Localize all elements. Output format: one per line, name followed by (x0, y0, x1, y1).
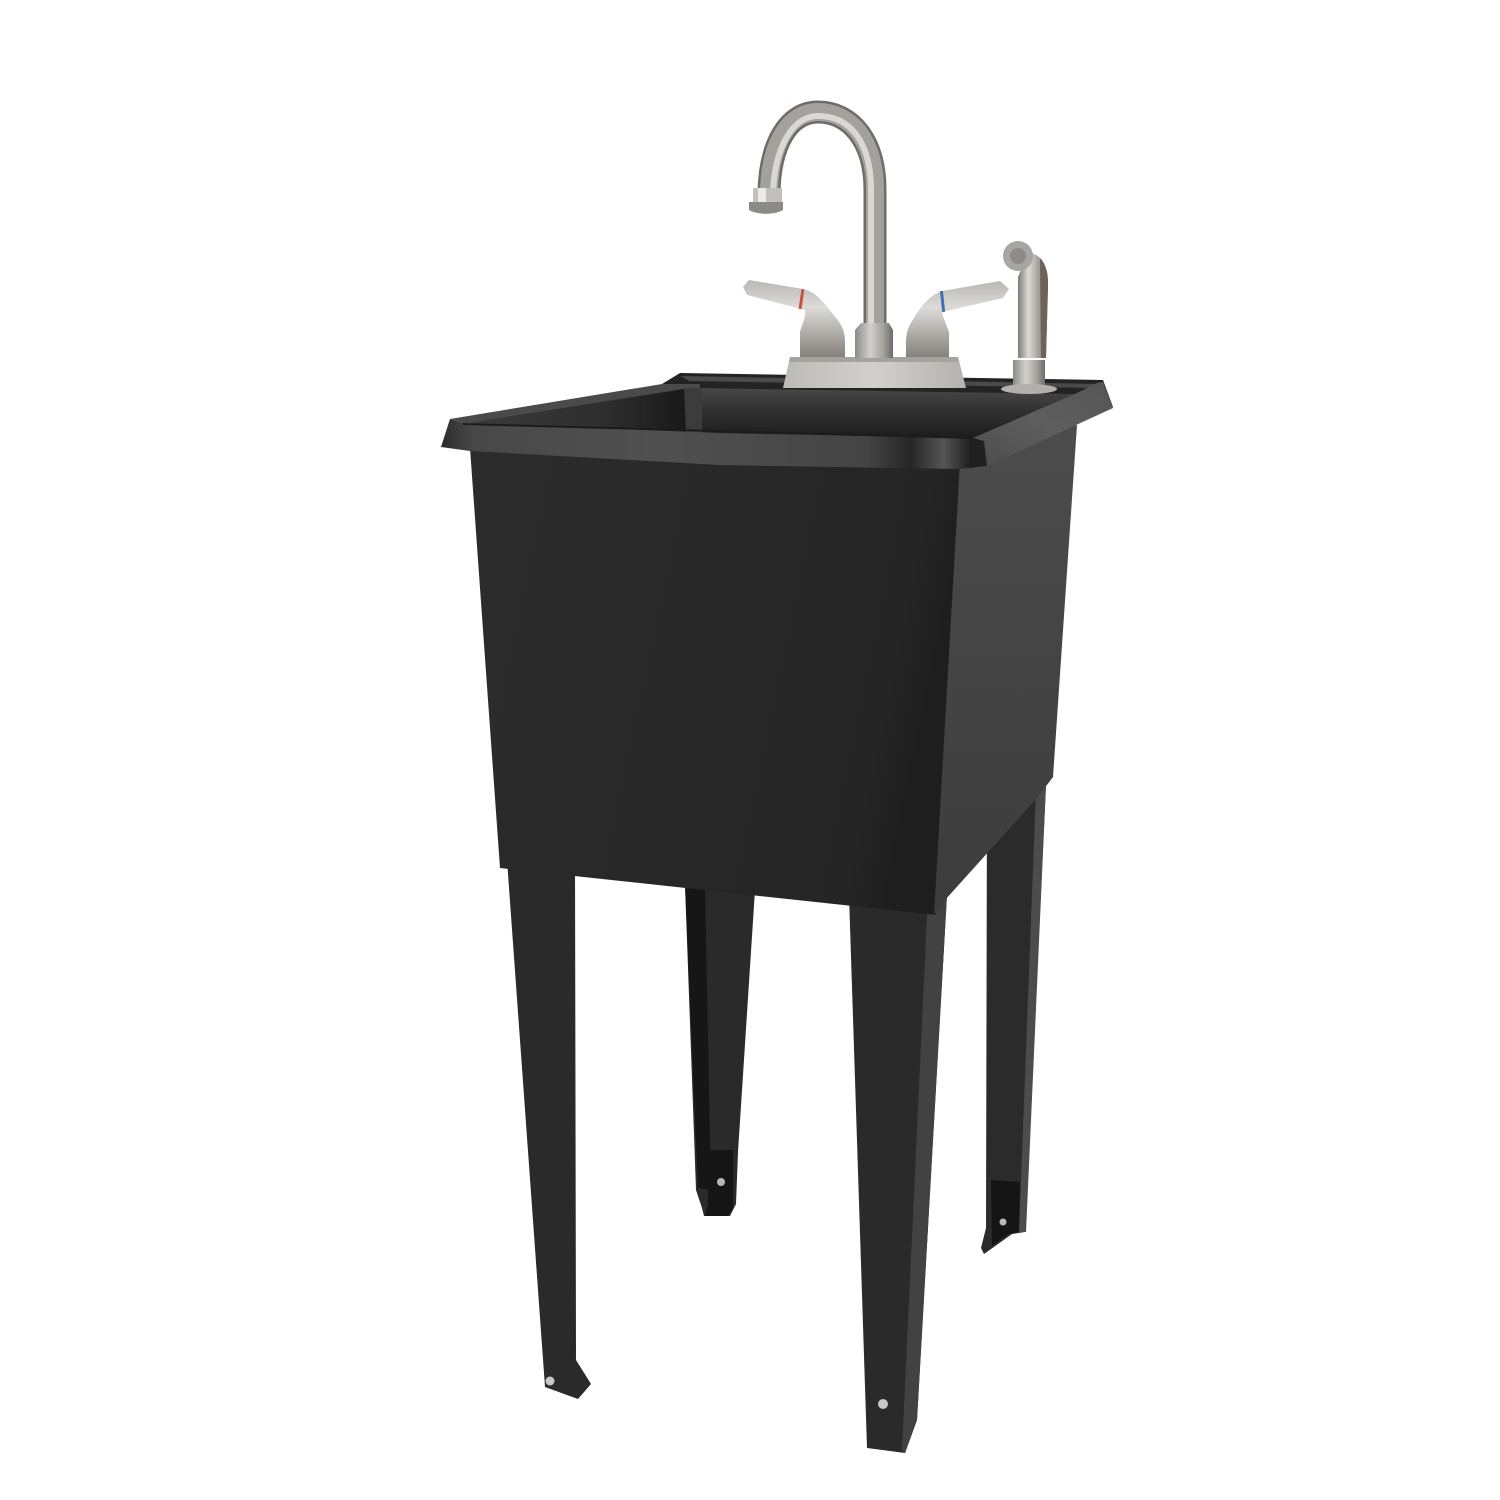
aerator (753, 188, 782, 202)
right rim surface (973, 382, 1113, 466)
gooseneck spout (769, 112, 875, 332)
tub front face (470, 448, 962, 915)
tub right side face (934, 425, 1077, 915)
tub rim and basin (441, 373, 1113, 469)
left handle (743, 280, 845, 357)
centre column hub (855, 323, 893, 358)
left rim top (450, 384, 700, 436)
back right leg (981, 785, 1046, 1254)
basin back wall (693, 388, 1075, 438)
faucet (743, 112, 1009, 388)
front left leg (507, 860, 591, 1399)
sprayer head (1003, 241, 1033, 271)
sprayer collar and flange (1013, 360, 1045, 387)
black tub body (470, 425, 1077, 915)
back left leg (685, 885, 755, 1216)
side sprayer (1001, 241, 1057, 394)
base plate (783, 357, 966, 388)
front rim band (441, 419, 987, 469)
front right leg (849, 895, 947, 1453)
left inner wall (470, 388, 695, 432)
back rim ledge (662, 373, 1113, 420)
sprayer body (1018, 252, 1048, 358)
right handle (906, 281, 1009, 357)
